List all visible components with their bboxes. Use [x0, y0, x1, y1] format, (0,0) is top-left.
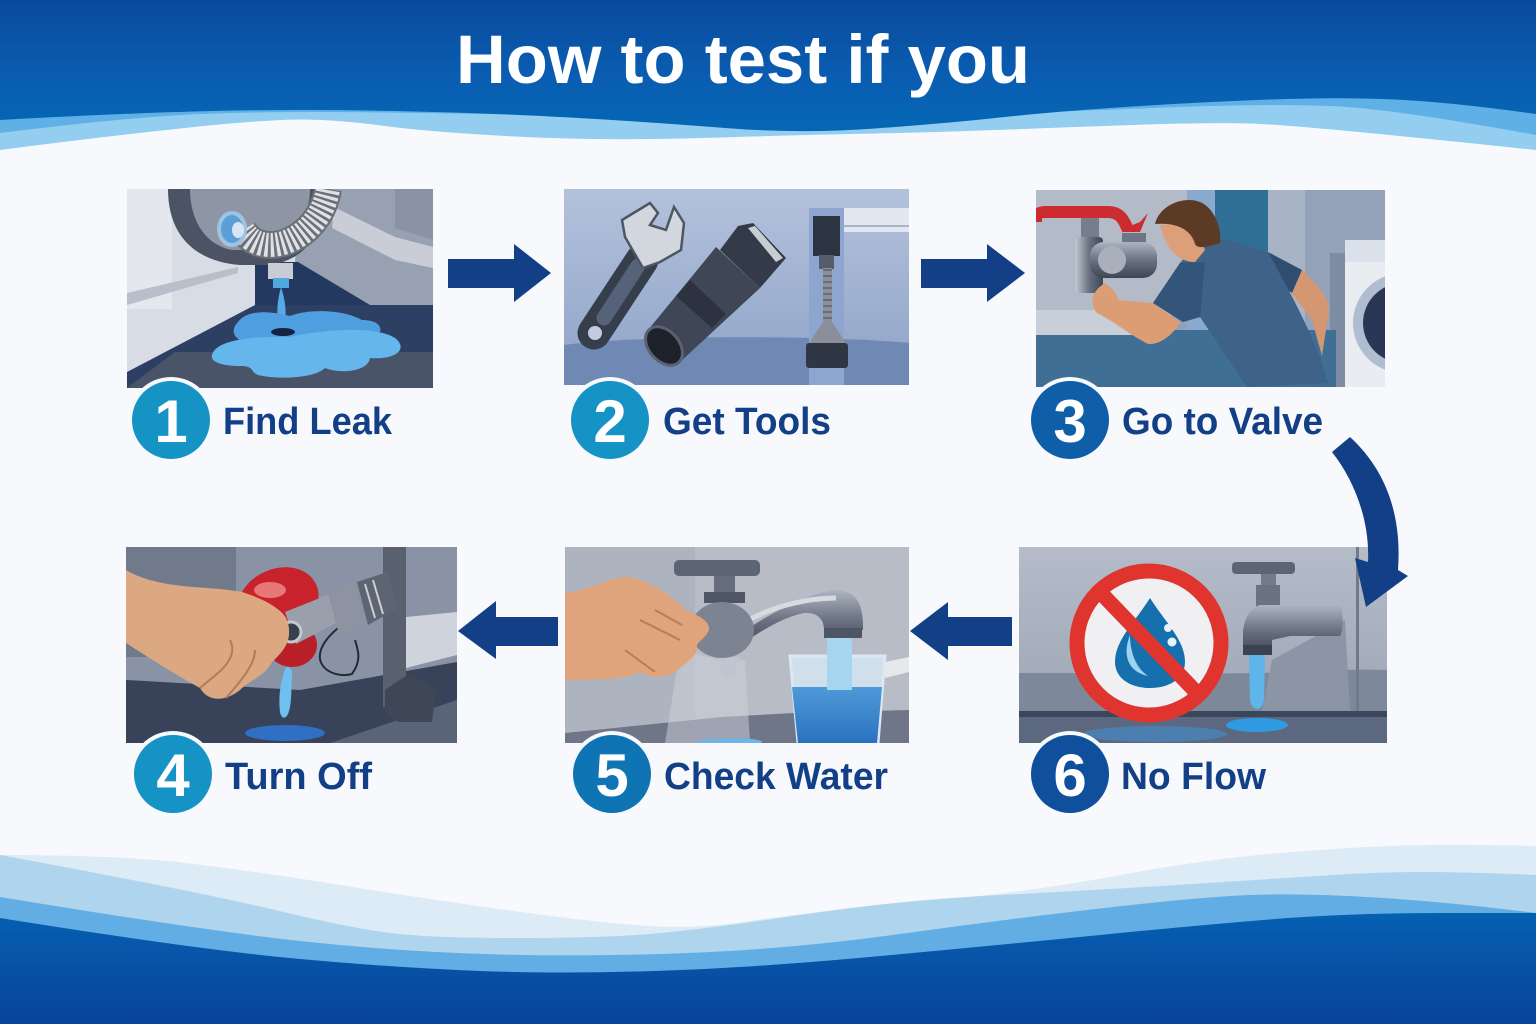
panel: step 2 illustration, tools — [564, 189, 909, 385]
arrow: step 2 to step 3 — [921, 244, 1025, 302]
step 4 label: 4 — [156, 742, 190, 809]
arrow: step 6 to step 5 — [910, 602, 1012, 660]
step 2 label: 2 — [593, 388, 627, 455]
step 6 label — [1027, 731, 1266, 817]
panel: step 1 illustration, leak under pipe — [127, 189, 433, 388]
step 5 label: 5 — [595, 742, 629, 809]
header wave banner — [0, 0, 1536, 150]
panel: step 5 illustration, tap filling glass — [565, 547, 909, 746]
step 5 label — [569, 731, 888, 817]
step 1 label: 1 — [154, 388, 188, 455]
step 3 label: Go to Valve — [1122, 401, 1323, 443]
step 5 label: Check Water — [664, 756, 888, 798]
step 4 label: Turn Off — [225, 756, 372, 798]
step 6 label: No Flow — [1121, 756, 1266, 798]
step 2 label: Get Tools — [663, 401, 831, 443]
step 1 label — [128, 377, 393, 463]
step 1 label: Find Leak — [223, 401, 393, 443]
step 2 label — [567, 377, 831, 463]
step 3 label: 3 — [1053, 388, 1087, 455]
panel: step 6 illustration, no flow sign — [1019, 547, 1387, 743]
step 4 label — [130, 731, 372, 817]
arrow: step 3 to step 6 — [1332, 437, 1408, 607]
panel: step 3 illustration, man at valve — [1036, 190, 1385, 387]
panel: step 4 illustration, hand on red valve — [126, 547, 457, 743]
footer wave banner — [0, 845, 1536, 1024]
arrow: step 1 to step 2 — [448, 244, 551, 302]
step 3 label — [1027, 377, 1323, 463]
title: How to test if you — [456, 21, 1030, 98]
step 6 label: 6 — [1053, 742, 1087, 809]
arrow: step 5 to step 4 — [458, 601, 558, 659]
